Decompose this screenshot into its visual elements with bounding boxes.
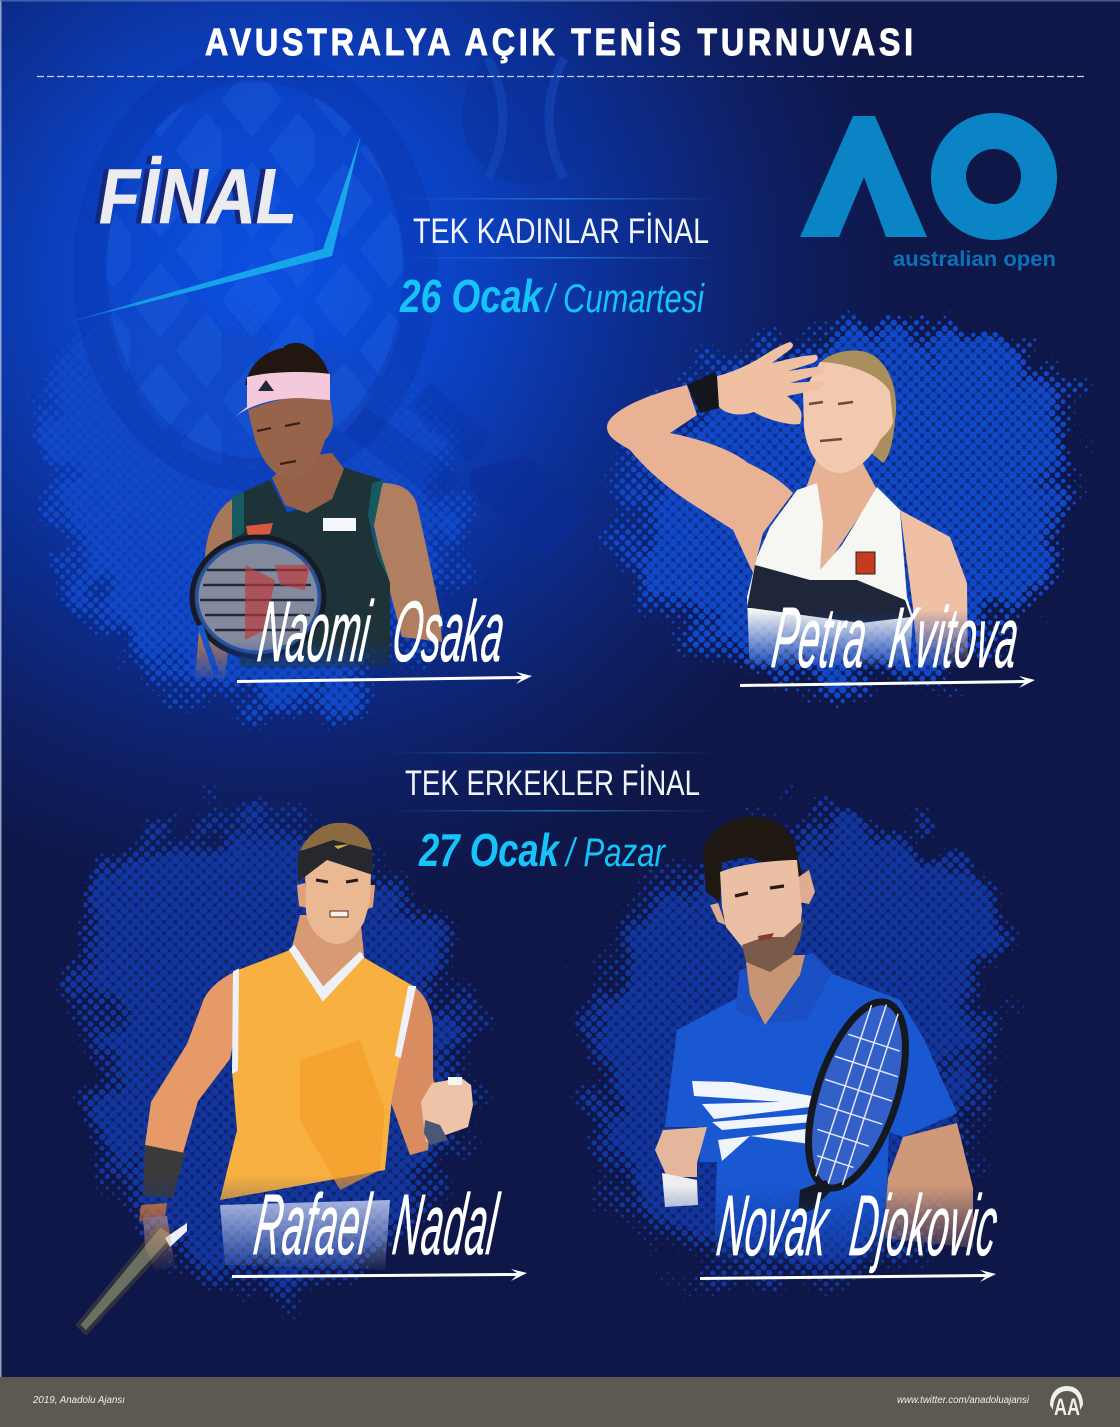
- women's final heading: TEK KADINLAR FİNAL: [413, 212, 709, 251]
- halftone blob: top left: [27, 292, 482, 736]
- face: [720, 860, 802, 962]
- men's final date: / Pazar: [564, 831, 666, 875]
- neck: [292, 915, 364, 986]
- eyes and mouth: [809, 402, 853, 441]
- chest and neck: [272, 453, 344, 513]
- halftone blob: top right: [594, 310, 1098, 708]
- women's final date: / Cumartesi: [544, 277, 705, 321]
- name: Novak Djokovic: Novak Djokovic: [713, 1178, 1003, 1274]
- shirt trim: [233, 946, 415, 1072]
- name: Naomi Osaka: Naomi Osaka: [254, 584, 510, 680]
- left arm: [145, 970, 242, 1153]
- men's final heading: TEK ERKEKLER FİNAL: [405, 764, 700, 803]
- men's final date: 27 Ocak: [418, 824, 561, 876]
- left arm: [195, 498, 235, 678]
- face: [305, 859, 371, 944]
- name: Rafael Nadal: Rafael Nadal: [250, 1177, 504, 1273]
- australian open logo: [800, 113, 1057, 271]
- collar: [735, 953, 832, 1023]
- shirt band: [747, 565, 911, 623]
- racket: [789, 990, 925, 1200]
- orange strap: [139, 1203, 167, 1221]
- visor: [232, 372, 330, 419]
- right arm: [900, 510, 968, 673]
- shirt: [220, 950, 415, 1200]
- footer bar: [0, 1377, 1120, 1427]
- halftone blob: bottom right: [554, 785, 1025, 1302]
- fist: [655, 1127, 707, 1177]
- hair: [300, 823, 372, 850]
- ears: [297, 883, 375, 909]
- hair: [820, 350, 896, 463]
- halftone blob: bottom left: [56, 784, 494, 1330]
- shirt: [665, 973, 957, 1262]
- footer credit: 2019, Anadolu Ajansı: [32, 1395, 125, 1406]
- hair: [703, 817, 803, 902]
- player: Naomi Osaka: [192, 343, 442, 678]
- icon: AA logo: AA: [1054, 1394, 1080, 1421]
- australian open logo: australian open: [893, 248, 1056, 271]
- icon: AA logo: [1050, 1386, 1083, 1421]
- player: Novak Djokovic: [655, 817, 973, 1262]
- shirt: [747, 483, 913, 677]
- wristband: [662, 1173, 698, 1207]
- women's final date: [399, 270, 705, 322]
- eyes and mouth: [735, 886, 784, 896]
- fist: [421, 1077, 473, 1142]
- title: AVUSTRALYA AÇIK TENİS TURNUVASI: [205, 22, 913, 64]
- final badge: FİNAL: [94, 152, 292, 240]
- wristband: [143, 1145, 185, 1198]
- logos: [323, 518, 356, 531]
- face: [803, 362, 893, 473]
- logo: [856, 552, 875, 574]
- shirt stripes: [692, 1081, 813, 1161]
- right arm: [372, 483, 442, 642]
- racket: [78, 1225, 176, 1333]
- wristband: [687, 372, 720, 413]
- final badge: [54, 135, 361, 326]
- eyes and mouth: [257, 423, 300, 464]
- hand: [717, 342, 825, 424]
- name: Petra Kvitova: Petra Kvitova: [768, 590, 1024, 686]
- racket: [192, 537, 324, 657]
- right arm: [390, 985, 435, 1155]
- eyes and mouth: [316, 880, 358, 882]
- neck: [806, 460, 876, 570]
- face: [248, 398, 334, 474]
- hair: [245, 343, 330, 385]
- hand: [143, 1216, 175, 1272]
- top: [232, 467, 390, 668]
- footer link: www.twitter.com/anadoluajansi: [897, 1395, 1030, 1406]
- right arm: [883, 1123, 973, 1248]
- headband: [298, 840, 373, 882]
- shorts: [220, 1200, 390, 1270]
- racket watermark: [90, 45, 590, 560]
- cuff: [424, 1120, 448, 1145]
- final badge: FİNAL: [99, 152, 297, 240]
- player: Rafael Nadal: [78, 823, 473, 1333]
- women's final date: 26 Ocak: [399, 270, 544, 322]
- ears: [710, 870, 815, 925]
- upper arm: [607, 385, 793, 573]
- beard: [742, 919, 804, 972]
- player: Petra Kvitova: [607, 342, 968, 677]
- neck: [745, 955, 805, 1025]
- dashed divider: [37, 76, 1084, 78]
